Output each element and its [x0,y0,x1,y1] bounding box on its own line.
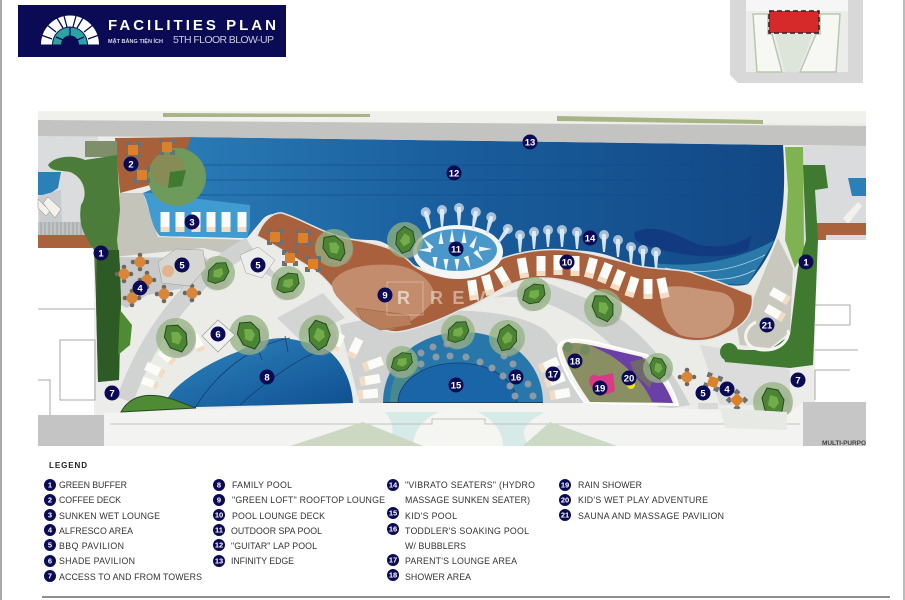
watermark [387,282,507,315]
legend column 2: FAMILY POOL [232,480,292,490]
icon: arch logo [41,15,99,44]
café tables [115,139,748,411]
family pool [160,336,353,408]
legend column 2: "GUITAR" LAP POOL [231,541,317,551]
deck: pool lounge deck [257,213,753,341]
plan number markers: 14 [585,234,596,244]
sauna pavilion [746,322,788,350]
pool 12: guitar lap pool [143,137,784,286]
loungers: sunken wet lounge [160,212,246,232]
plan number markers: 13 [525,138,535,148]
legend column 1: GREEN BUFFER [59,480,127,490]
highlighted floor area [769,11,819,33]
legend column 1: BBQ PAVILION [59,541,124,551]
plan number markers: 5 [255,260,261,272]
legend column 4: 21 [561,510,569,520]
legend column 4 [559,479,724,521]
plan number markers: 5 [179,260,185,272]
legend column 3 [387,479,535,582]
play area [558,339,678,405]
legend column 4: 20 [561,496,569,504]
legend column 3: SHOWER AREA [405,572,471,582]
legend column 1: 3 [48,510,52,520]
legend column 2: 11 [215,526,223,534]
banner floor label: 5TH FLOOR BLOW-UP [173,34,274,46]
watermark: R [397,288,410,308]
legend column 3: 15 [389,508,397,518]
legend [44,461,724,582]
legend column 3: TODDLER'S SOAKING POOL [405,526,529,536]
bottom podium view [104,402,803,446]
plan number markers: 4 [724,384,730,396]
plan number markers: 9 [382,290,388,302]
legend column 3: 16 [389,524,397,534]
legend column 4: RAIN SHOWER [578,480,642,490]
legend column 4: SAUNA AND MASSAGE PAVILION [578,511,724,521]
legend column 1: 7 [48,572,52,580]
kid's pool [383,332,543,404]
plan number markers: 16 [511,372,521,384]
legend column 2: INFINITY EDGE [231,556,294,566]
legend column 1 [44,479,202,582]
legend column 2: 10 [215,510,223,520]
legend column 2: "GREEN LOFT" ROOFTOP LOUNGE [232,495,385,505]
legend column 2: OUTDOOR SPA POOL [231,526,322,536]
legend column 1: 6 [48,556,52,566]
green buffer right [720,147,828,368]
lighter lounge decks [332,265,435,330]
legend column 3: "VIBRATO SEATERS" (HYDRO [405,480,535,490]
legend column 3: W/ BUBBLERS [405,541,466,551]
legend column 1: ALFRESCO AREA [59,526,133,536]
legend column 3: 14 [389,480,398,490]
plan number markers: 8 [264,372,270,384]
ground paving [113,136,793,415]
legend column 4: KID'S WET PLAY ADVENTURE [578,495,708,505]
legend column 3: MASSAGE SUNKEN SEATER) [405,495,530,505]
plan number markers: 20 [624,374,634,384]
plan number markers: 7 [109,388,115,400]
plan number markers [94,134,814,400]
legend column 4: 19 [561,480,569,490]
loungers: pool deck [467,255,669,301]
legend column 2: POOL LOUNGE DECK [232,511,325,521]
left wing [38,136,104,446]
legend column 2: 12 [215,540,223,550]
legend column 3: 18 [389,570,397,580]
legend column 1: SHADE PAVILION [59,556,135,566]
plan number markers: 19 [595,384,605,394]
loungers: side areas [141,287,791,400]
toddler's pool bubblers [418,340,536,400]
upper roof band [38,111,866,146]
plan number markers: 21 [762,320,773,332]
plan number markers: 6 [215,330,221,340]
plan number markers: 12 [449,168,459,180]
key plan [730,0,863,83]
banner subtitle: MẶT BẰNG TIỆN ÍCH [108,37,163,45]
plan number markers: 1 [803,258,809,268]
legend column 3: PARENT'S LOUNGE AREA [405,556,517,566]
legend column 2: 8 [217,480,221,490]
legend column 1: SUNKEN WET LOUNGE [59,511,160,521]
green buffer left [48,141,132,382]
legend column 3: 17 [389,556,397,564]
plan number markers: 11 [451,244,462,256]
legend column 1: 5 [48,540,52,550]
title banner [18,5,286,57]
vibrato seaters fountains [420,203,661,269]
legend heading: LEGEND [49,461,87,470]
plan number markers: 7 [795,376,801,386]
plan number markers: 4 [137,284,143,294]
plan number markers: 17 [548,370,558,380]
plan number markers: 2 [128,160,134,170]
legend column 1: 2 [48,496,52,504]
site plan [38,111,866,447]
plan number markers: 15 [451,380,462,392]
legend column 1: ACCESS TO AND FROM TOWERS [59,572,202,582]
legend column 1: 1 [48,480,52,490]
legend column 3: KID'S POOL [405,511,457,521]
spa pool with fountains [413,225,503,279]
legend column 2: 13 [215,556,223,566]
banner heading: FACILITIES PLAN [108,17,276,34]
deck: coffee deck [115,137,191,193]
right wing [803,146,866,447]
plan number markers: 1 [98,248,104,260]
legend column 2 [213,479,385,567]
legend column 1: COFFEE DECK [59,495,121,505]
plan number markers: 5 [700,388,706,400]
plan number markers: 10 [562,258,572,268]
multi-purpose label: MULTI-PURPO [822,440,866,447]
plan number markers: 18 [570,356,580,368]
plan number markers: 3 [189,218,195,228]
legend column 1: 4 [48,526,53,534]
legend column 2: 9 [217,496,221,504]
watermark: REVE [430,288,507,308]
BBQ and shade pavilions [158,247,718,409]
planters and trees [121,148,793,422]
